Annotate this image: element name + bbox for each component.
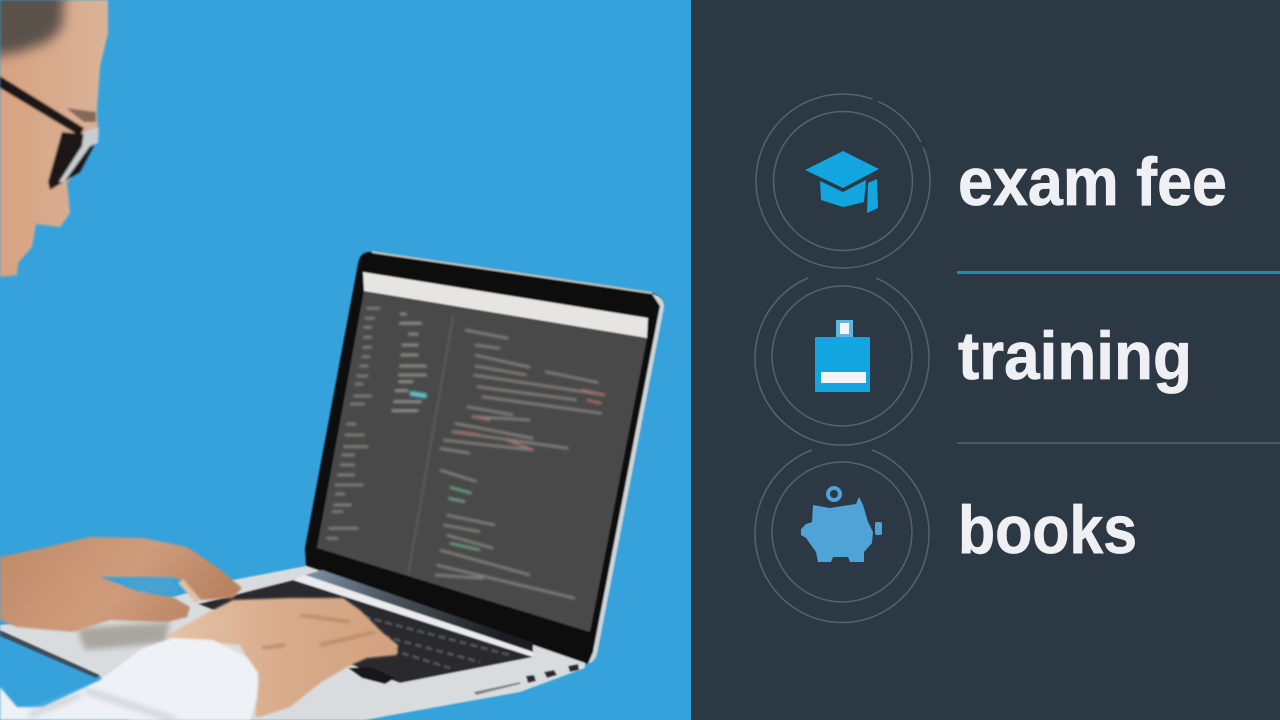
- laptop lid: [305, 252, 664, 664]
- file tree: [392, 314, 427, 411]
- gap between left fingers: [122, 578, 178, 592]
- hair: [0, 0, 66, 60]
- item: training: [755, 278, 1192, 445]
- hinge reflection band: [305, 570, 533, 652]
- left finger highlight: [178, 579, 201, 603]
- silver strip above keyboard: [293, 575, 533, 658]
- laptop deck: [0, 566, 585, 720]
- item: exam fee: [756, 94, 1227, 268]
- screen title bar: [363, 272, 648, 338]
- label: books: books: [958, 492, 1137, 568]
- lens highlight: [59, 127, 99, 182]
- divider: grey: [957, 442, 1280, 444]
- sleeve fold shading: [30, 690, 175, 720]
- keys by right hand: [348, 667, 395, 684]
- concentric circles: [756, 94, 930, 268]
- screen: [317, 291, 647, 632]
- concentric circles: [755, 278, 929, 445]
- divider: blue: [957, 271, 1280, 274]
- right hand: [165, 598, 398, 717]
- editor dividers: [408, 315, 453, 573]
- photo: hands and sleeve: [0, 537, 398, 720]
- side ports: [526, 664, 579, 683]
- glasses temple arm: [0, 76, 84, 136]
- icon: blue book: [815, 320, 870, 392]
- right finger creases: [262, 615, 375, 648]
- coloured code accents: [457, 390, 605, 450]
- front notch: [474, 682, 520, 695]
- book tab: [836, 320, 853, 338]
- piggy body: [801, 497, 873, 562]
- silver lid rim: [588, 294, 664, 664]
- photo: laptop: [0, 251, 664, 720]
- panel: blue photo background: [0, 0, 691, 720]
- glasses lens: [48, 132, 97, 190]
- icon: graduation cap: [805, 151, 879, 213]
- keyboard key rows: [300, 600, 510, 668]
- label: training: training: [958, 318, 1192, 394]
- palm shadow on deck: [77, 622, 170, 650]
- item: books: [755, 450, 1137, 623]
- book body: [815, 337, 870, 392]
- eyebrow: [66, 108, 96, 122]
- editor content: [327, 308, 605, 598]
- icon: piggy bank: [801, 488, 882, 562]
- code lines: [435, 330, 605, 598]
- concentric circles: [755, 450, 929, 623]
- left hand: [0, 537, 242, 632]
- sidebar file list: [327, 308, 380, 538]
- piggy tail: [875, 522, 882, 535]
- label: exam fee: exam fee: [958, 144, 1227, 220]
- deck lower edge shadow: [0, 630, 100, 678]
- lid top rim: [372, 251, 652, 294]
- keyboard: [198, 580, 533, 683]
- face: [0, 0, 108, 277]
- list: three cost items: [755, 94, 1280, 623]
- shirt sleeve: [0, 638, 258, 720]
- piggy coin: [828, 488, 840, 500]
- book stripe: [821, 372, 866, 383]
- highlighted file: [410, 393, 427, 396]
- glasses: [0, 76, 99, 190]
- panel: dark list background: [691, 0, 1280, 720]
- photo: person with glasses, face in profile: [0, 0, 108, 277]
